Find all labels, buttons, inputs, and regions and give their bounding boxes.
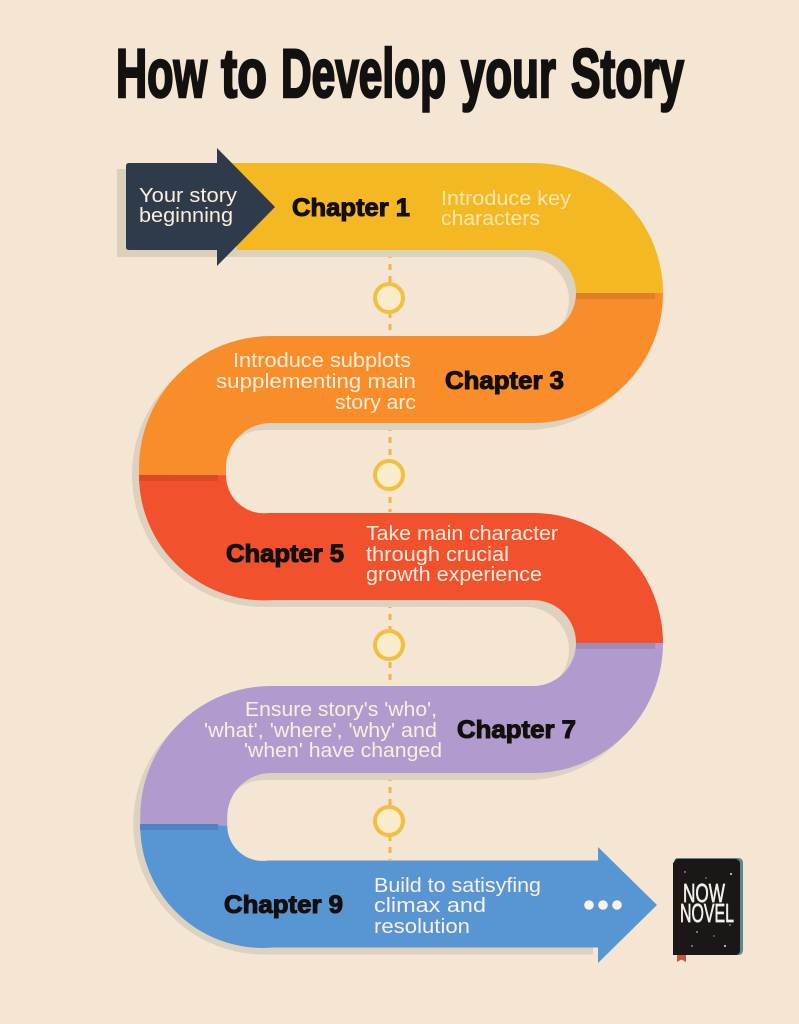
title: to (221, 35, 267, 112)
chapter 3 label and text: supplementing main (216, 370, 416, 393)
chapter 5 label and text: through crucial (366, 543, 509, 566)
connector dashes and circles (375, 252, 403, 860)
segment: orange ribbon (182, 293, 620, 475)
title: Develop (281, 35, 446, 112)
title (116, 35, 684, 112)
chapter 5 label and text: growth experience (366, 563, 542, 586)
chapter 7 label and text: 'when' have changed (244, 739, 442, 762)
title: Story (571, 35, 684, 112)
ellipsis dots (584, 900, 622, 910)
title: How (116, 35, 207, 112)
title: your (461, 35, 556, 112)
start arrow: Your story beginning: Your story (139, 184, 238, 207)
chapter 3 label and text: Introduce subplots (233, 349, 411, 372)
chapter 3 label and text: Chapter 3 (445, 367, 564, 395)
chapter 1 label and text (292, 187, 572, 230)
chapter 7 label and text: Chapter 7 (457, 716, 576, 744)
segment: yellow ribbon (220, 206, 620, 293)
fold shadows between segments (139, 293, 655, 830)
chapter 5 label and text: Chapter 5 (226, 540, 344, 568)
chapter 5 label and text: Take main character (366, 522, 558, 545)
chapter 7 label and text (204, 698, 576, 762)
start arrow: Your story beginning (117, 148, 275, 266)
start arrow: Your story beginning: beginning (139, 204, 233, 227)
icon: Now Novel book: NOW (683, 878, 725, 908)
chapter 7 label and text: Ensure story's 'who', (245, 698, 437, 721)
chapter 5 label and text (226, 522, 558, 586)
chapter 9 label and text: climax and (374, 894, 486, 917)
icon: Now Novel book (673, 858, 743, 962)
segment: red ribbon (182, 475, 619, 643)
chapter 1 label and text: Introduce key (441, 187, 572, 210)
segment: purple ribbon (184, 643, 620, 825)
segment: blue ribbon with arrow head (184, 825, 657, 963)
chapter 9 label and text: resolution (374, 915, 470, 938)
chapter 7 label and text: 'what', 'where', 'why' and (204, 719, 437, 742)
chapter 9 label and text (224, 874, 541, 938)
chapter 1 label and text: characters (441, 207, 540, 230)
ribbon shadow (153, 214, 612, 911)
chapter 9 label and text: Chapter 9 (224, 891, 343, 919)
chapter 9 label and text: Build to satisyfing (374, 874, 541, 897)
chapter 1 label and text: Chapter 1 (292, 194, 410, 222)
chapter 3 label and text: story arc (335, 391, 416, 414)
icon: Now Novel book: NOVEL (680, 898, 734, 928)
chapter 3 label and text (216, 349, 564, 414)
